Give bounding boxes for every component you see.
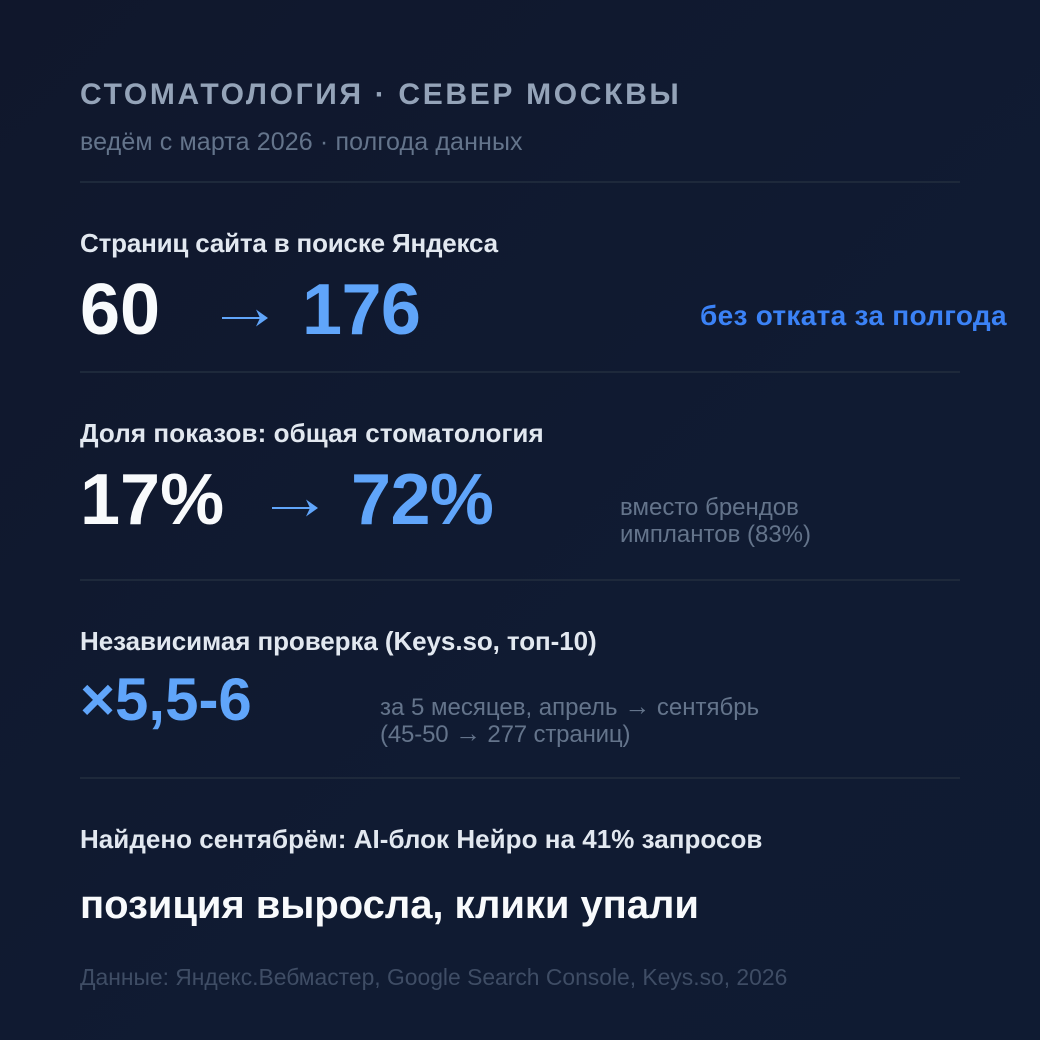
note: five months: (45-50 → 277 страниц) [380, 719, 630, 748]
note: instead of implant brands: имплантов (83%) [620, 521, 811, 548]
panel: impression share [80, 418, 811, 548]
value: 60: 60 [80, 270, 160, 350]
panel: independent check [80, 626, 759, 748]
note: instead of implant brands: вместо брендов [620, 494, 799, 521]
value: multiplier: ×5,5-6 [80, 666, 252, 733]
callout: no rollback: без отката за полгода [700, 300, 1007, 331]
value: 176: 176 [302, 270, 420, 350]
value: 72%: 72% [351, 460, 493, 540]
panel: finding [80, 824, 762, 927]
subtitle: ведём с марта 2026 · полгода данных [80, 128, 523, 156]
value: 17%: 17% [80, 460, 224, 540]
panel: pages in Yandex search [80, 228, 1007, 350]
headline: position up, clicks down: позиция выросла, клики упали [80, 883, 699, 927]
arrow: share [272, 500, 318, 516]
note: instead of implant brands [620, 494, 811, 548]
title: СТОМАТОЛОГИЯ · СЕВЕР МОСКВЫ [80, 78, 681, 111]
label: finding: Найдено сентябрём: AI-блок Нейро на 41% запросов [80, 824, 762, 854]
label: share: Доля показов: общая стоматология [80, 418, 544, 448]
label: pages: Страниц сайта в поиске Яндекса [80, 228, 498, 258]
note: five months: за 5 месяцев, апрель → сентябрь [380, 692, 759, 721]
note: five months [380, 692, 759, 748]
footer: sources: Данные: Яндекс.Вебмастер, Google Search Console, Keys.so, 2026 [80, 964, 787, 990]
arrow: pages [222, 310, 268, 326]
label: check: Независимая проверка (Keys.so, топ-10) [80, 626, 597, 656]
